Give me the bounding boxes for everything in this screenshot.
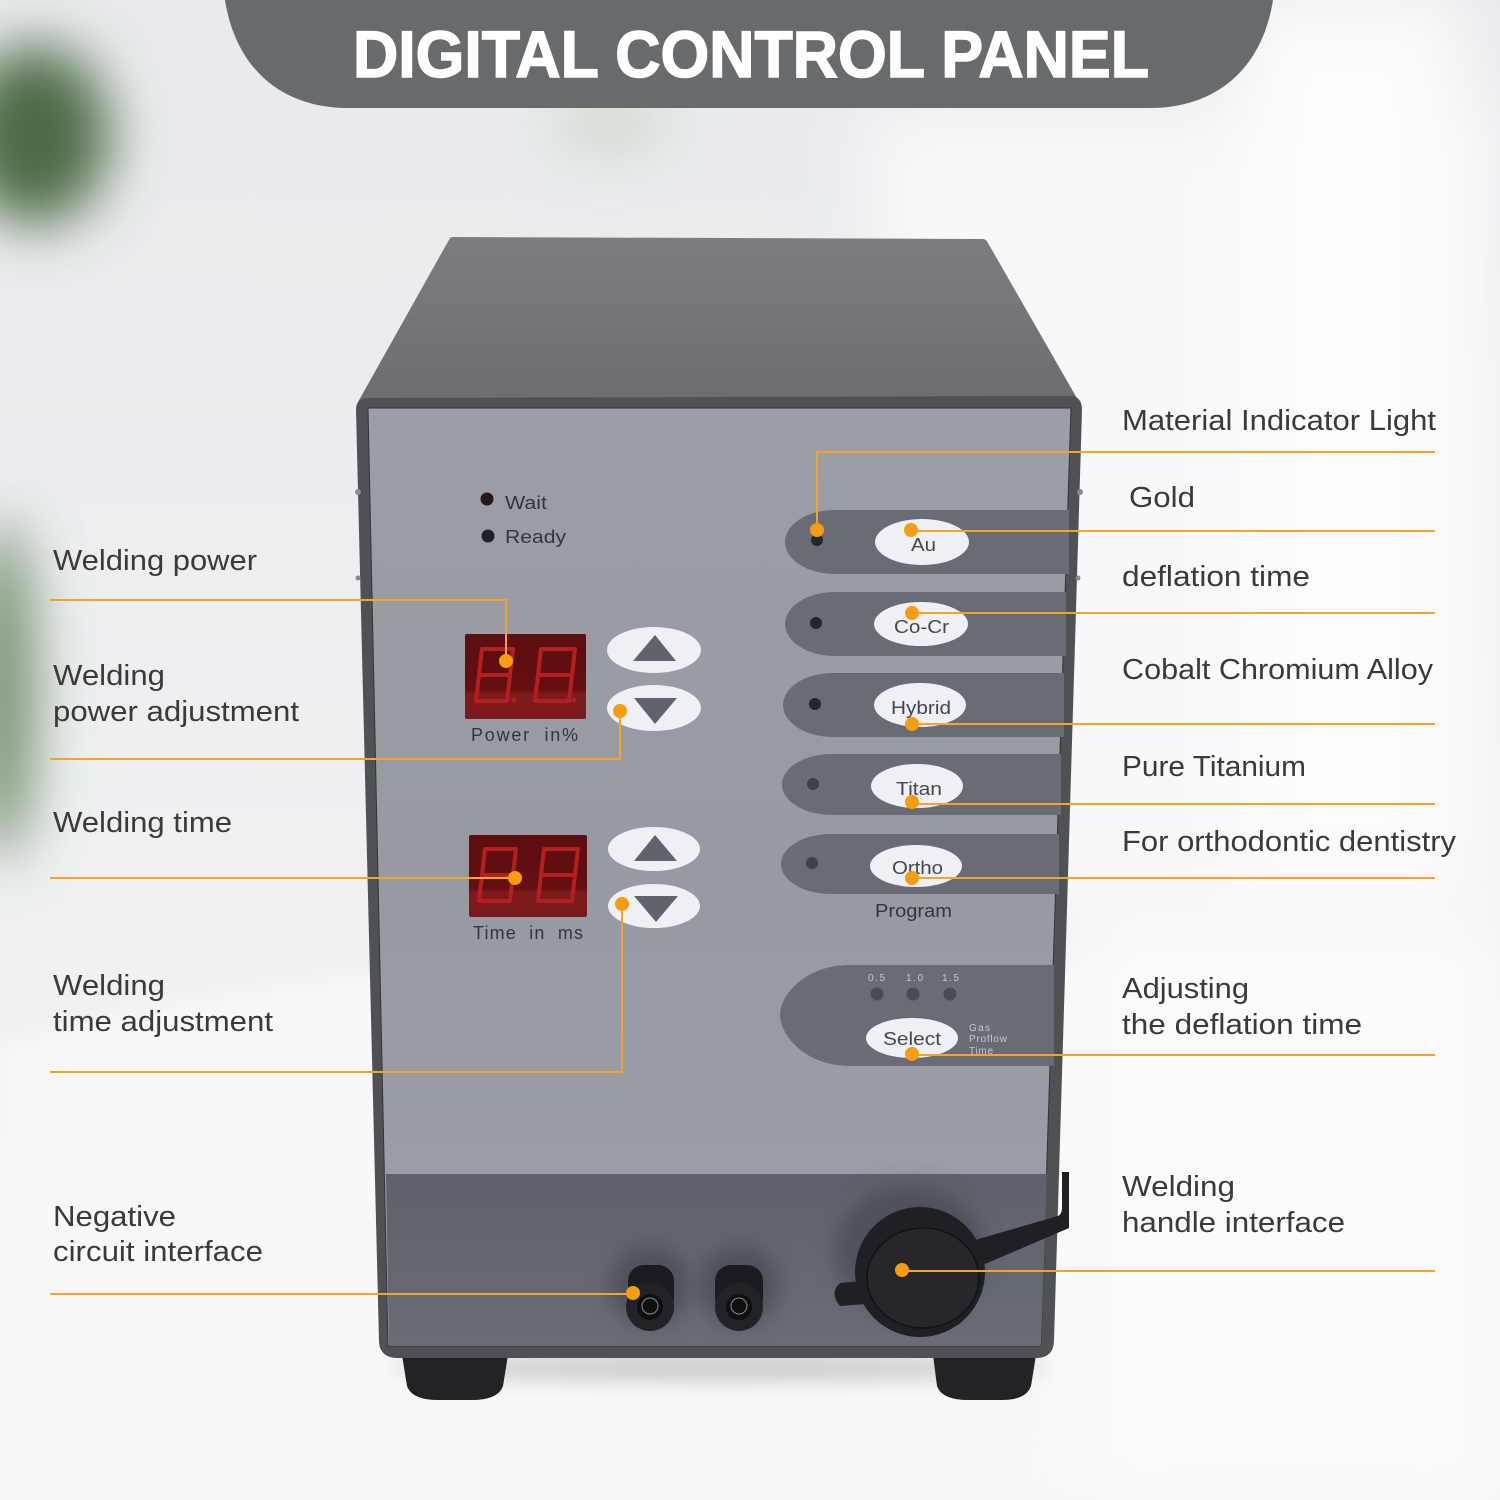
right labels: Welding: [1122, 1171, 1235, 1203]
left labels: Welding: [53, 970, 165, 1002]
machine top: [358, 237, 1078, 402]
power display: [465, 634, 586, 745]
wait and ready indicators: Ready: [505, 527, 566, 547]
program buttons: Au: [911, 535, 936, 555]
left labels: circuit interface: [53, 1236, 263, 1268]
frame screws: [355, 489, 1083, 580]
time up button: [608, 827, 700, 871]
welding handle socket: [834, 1172, 1069, 1337]
left labels: Negative: [53, 1201, 176, 1233]
right labels: Material Indicator Light: [1122, 405, 1436, 437]
leader lines: [50, 452, 1435, 1300]
program leds: [806, 534, 823, 869]
title: DIGITAL CONTROL PANEL: [353, 17, 1149, 91]
welding machine: [355, 237, 1083, 1400]
program buttons: Ortho: [892, 858, 943, 878]
left labels: [53, 545, 299, 1268]
program buttons: Program: [875, 901, 952, 921]
wait and ready indicators: [480, 492, 566, 547]
gas preflow selector: 0.5: [868, 973, 885, 984]
title banner: [225, 0, 1273, 108]
left labels: Welding: [53, 660, 165, 692]
machine feet: [402, 1355, 1036, 1400]
gas preflow selector: 1.5: [942, 973, 959, 984]
program buttons: Hybrid: [891, 698, 951, 718]
gas preflow selector: [866, 973, 1008, 1058]
lower dark panel: [386, 1174, 1047, 1345]
power display: Power in%: [471, 725, 578, 745]
right labels: deflation time: [1122, 561, 1310, 593]
front panel: [368, 408, 1071, 1346]
program buttons: Co-Cr: [894, 617, 949, 637]
right labels: For orthodontic dentistry: [1122, 826, 1457, 858]
negative circuit sockets: [610, 1245, 779, 1331]
program buttons: [870, 519, 969, 921]
right labels: Cobalt Chromium Alloy: [1122, 654, 1434, 686]
left labels: Welding time: [53, 807, 232, 839]
gas preflow selector: Select: [883, 1029, 941, 1049]
right labels: handle interface: [1122, 1207, 1345, 1239]
right labels: [1122, 405, 1457, 1239]
time display: [469, 835, 587, 943]
right labels: the deflation time: [1122, 1009, 1362, 1041]
left labels: time adjustment: [53, 1006, 273, 1038]
wait and ready indicators: Wait: [505, 493, 547, 513]
left labels: Welding power: [53, 545, 257, 577]
time display: Time in ms: [473, 923, 583, 943]
left labels: power adjustment: [53, 696, 299, 728]
program buttons: Titan: [896, 779, 942, 799]
right labels: Gold: [1129, 482, 1195, 514]
right labels: Adjusting: [1122, 973, 1249, 1005]
power down button: [607, 685, 701, 731]
gas preflow selector: 1.0: [906, 973, 923, 984]
machine front frame: [356, 396, 1082, 1358]
right labels: Pure Titanium: [1122, 751, 1306, 783]
power up button: [607, 627, 701, 673]
gas preflow selector: Proflow: [969, 1034, 1008, 1045]
time down button: [608, 884, 700, 928]
gas preflow selector: Time: [969, 1046, 993, 1057]
gas preflow selector: Gas: [969, 1023, 990, 1034]
program strips: [780, 510, 1069, 1066]
